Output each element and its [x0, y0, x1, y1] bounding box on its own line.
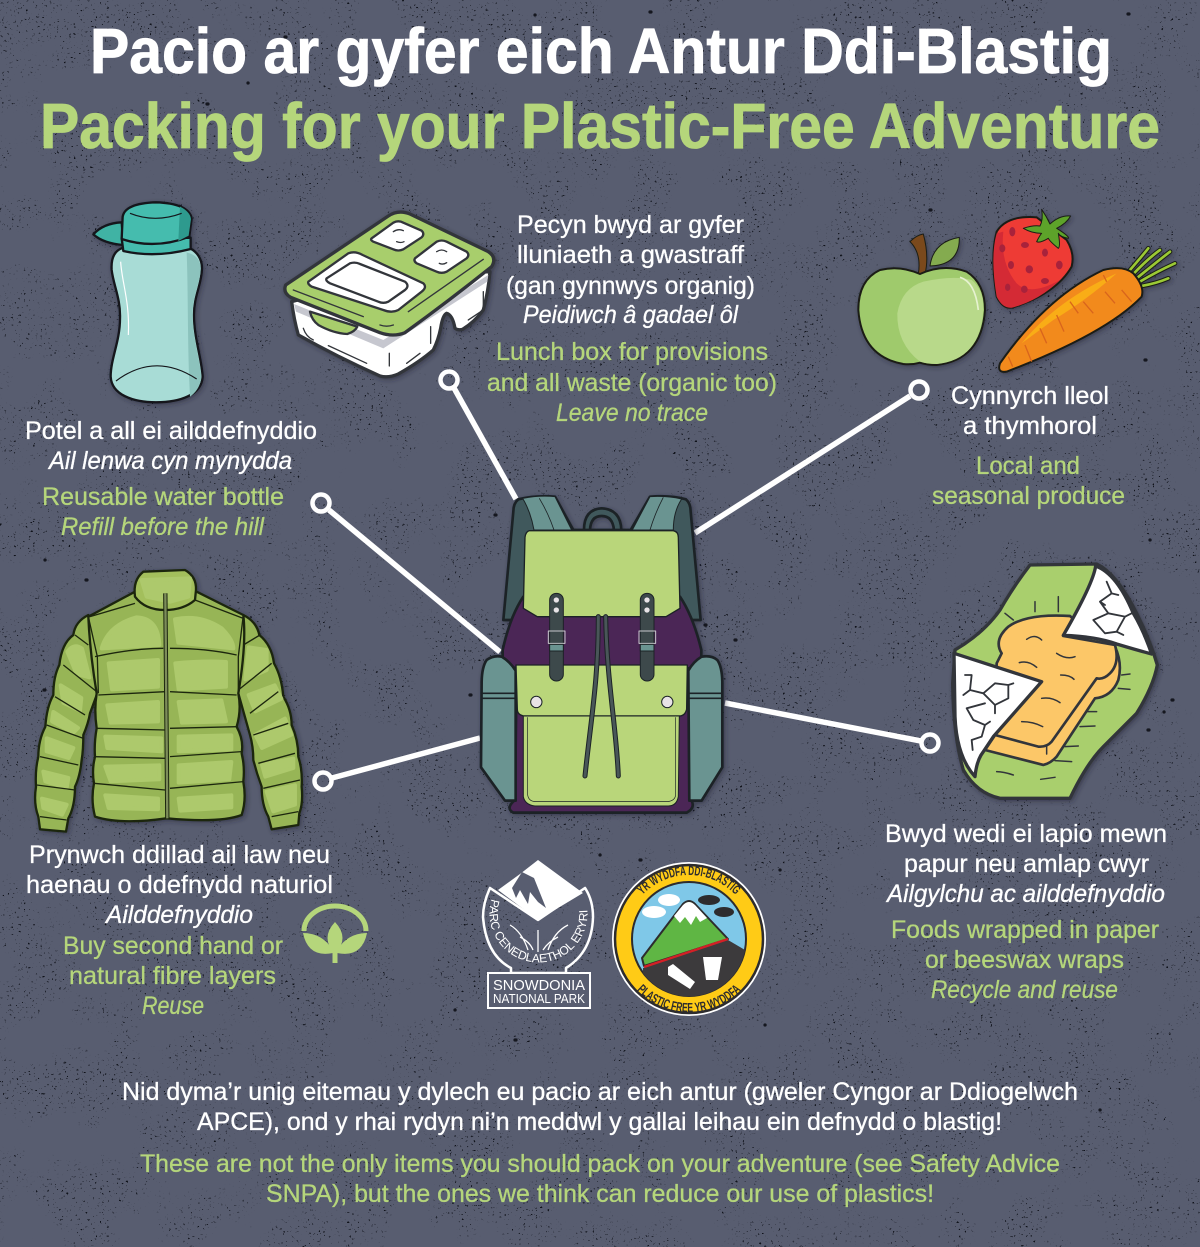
text block: local produce [932, 382, 1125, 510]
text block: closing note: APCE), ond y rhai rydyn ni’n meddwl y gallai leihau ein defnydd o blastig! [197, 1108, 1002, 1136]
text block: clothing: Ailddefnyddio [104, 901, 253, 929]
strawberry [993, 209, 1073, 308]
text block: clothing: haenau o ddefnydd naturiol [26, 871, 333, 899]
logo: Plastic Free Yr Wyddfa badge [612, 862, 766, 1016]
text block: food wraps: Bwyd wedi ei lapio mewn [885, 820, 1167, 848]
title: Pacio ar gyfer eich Antur Ddi-Blastig [90, 15, 1112, 87]
text block: lunch box: (gan gynnwys organig) [506, 272, 755, 300]
text block: water bottle: Reusable water bottle [42, 483, 284, 511]
title [40, 15, 1160, 162]
arrow: jacket connector [314, 738, 480, 790]
logo: Plastic Free Yr Wyddfa badge: YR WYDDFA DDI-BLASTIG [636, 866, 740, 894]
text block: local produce: Cynnyrch lleol [951, 382, 1109, 410]
text block: closing note: These are not the only items you should pack on your adventure (see Safety Advice [140, 1150, 1060, 1178]
text block: clothing [26, 841, 333, 1020]
text block: water bottle: Refill before the hill [61, 513, 265, 541]
icon: natural fibre plant symbol [303, 906, 367, 963]
text block: lunch box [487, 211, 777, 427]
text block: food wraps: papur neu amlap cwyr [904, 850, 1149, 878]
text block: local produce: a thymhorol [963, 412, 1097, 440]
text block: water bottle: Potel a all ei ailddefnyddio [25, 417, 317, 445]
text block: clothing: natural fibre layers [69, 962, 276, 990]
text block: lunch box: lluniaeth a gwastraff [517, 241, 744, 269]
apple [858, 234, 985, 365]
icon: water bottle [93, 202, 203, 402]
text block: water bottle: Ail lenwa cyn mynydda [47, 447, 292, 475]
text block: food wraps: Recycle and reuse [931, 976, 1118, 1004]
logo: Plastic Free Yr Wyddfa badge: PLASTIC FREE YR WYDDFA [637, 984, 741, 1012]
text block: food wraps: Ailgylchu ac ailddefnyddio [885, 880, 1165, 908]
text block: lunch box: Lunch box for provisions [496, 338, 768, 366]
icon: lunch box [285, 212, 494, 377]
icon: puffer jacket [35, 570, 302, 832]
text block: food wraps: Foods wrapped in paper [891, 916, 1159, 944]
arrow: bottle connector [312, 494, 500, 652]
icon: apple, strawberry and carrot [858, 209, 1175, 372]
text block: food wraps: or beeswax wraps [925, 946, 1124, 974]
arrow: produce connector [695, 382, 928, 533]
text block: local produce: Local and [976, 452, 1080, 480]
text block: lunch box: and all waste (organic too) [487, 369, 777, 397]
logo: Snowdonia National Park: NATIONAL PARK [493, 992, 586, 1006]
logo: Snowdonia National Park: PARC CENEDLAETHOL ERYRI [489, 900, 588, 963]
logo: Snowdonia National Park: SNOWDONIA [493, 977, 585, 994]
icon: backpack [481, 496, 722, 813]
text block: local produce: seasonal produce [932, 482, 1125, 510]
logo: Snowdonia National Park [482, 860, 594, 1009]
text block: lunch box: Leave no trace [556, 399, 708, 427]
text block: lunch box: Peidiwch â gadael ôl [523, 301, 739, 329]
text block: closing note: Nid dyma’r unig eitemau y dylech eu pacio ar eich antur (gweler Cyngor ar Ddiogelwch [122, 1078, 1078, 1106]
text block: clothing: Prynwch ddillad ail law neu [29, 841, 330, 869]
text block: lunch box: Pecyn bwyd ar gyfer [517, 211, 744, 239]
icon: sandwich in beeswax wrap [953, 564, 1157, 798]
text block: water bottle [25, 417, 317, 541]
arrow: lunch box connector [440, 372, 516, 499]
carrot [999, 248, 1175, 372]
text block: closing note [122, 1078, 1078, 1208]
arrow: sandwich connector [725, 703, 938, 752]
text block: food wraps [885, 820, 1167, 1004]
text block: closing note: SNPA), but the ones we think can reduce our use of plastics! [266, 1180, 934, 1208]
text block: clothing: Reuse [142, 992, 204, 1020]
text block: clothing: Buy second hand or [63, 932, 283, 960]
